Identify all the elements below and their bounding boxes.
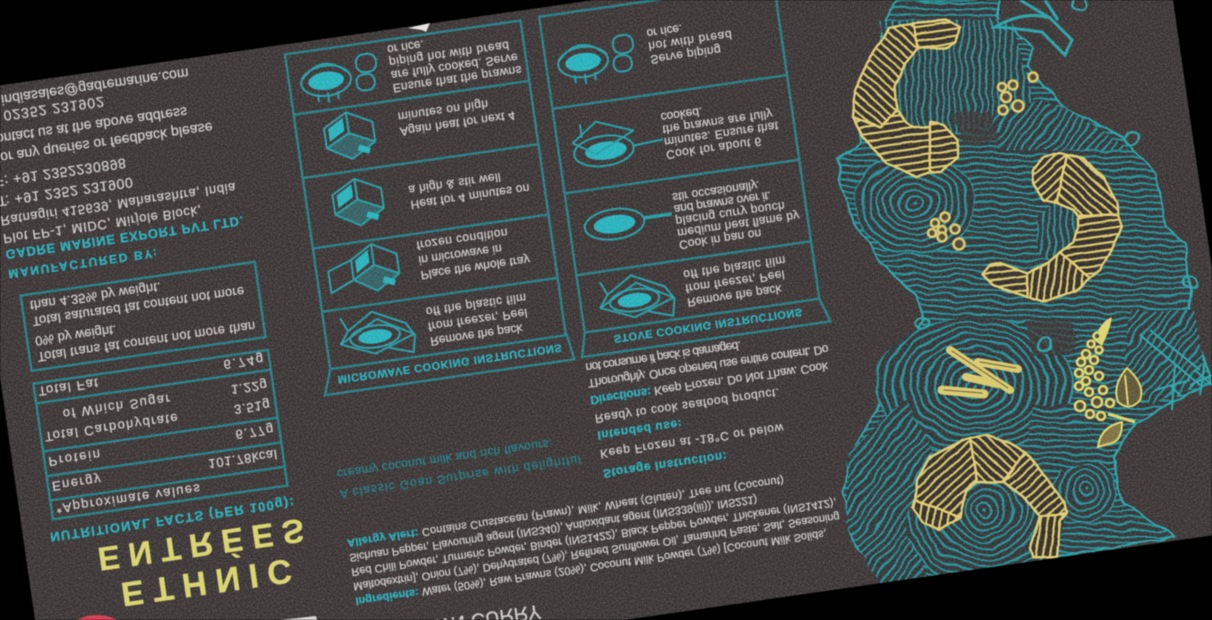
- step 2: Place the whole tray: [420, 253, 531, 282]
- step 4: Again heat for next 4: [399, 108, 516, 139]
- step 3: the prawns are fully: [662, 107, 773, 137]
- step 1: off the plastic film: [682, 253, 786, 282]
- step 1: [596, 253, 791, 326]
- panel: fat content note: Total saturated fat content not more: [31, 284, 245, 329]
- logo: white wedge: [280, 616, 317, 620]
- step 2: in microwave in: [418, 242, 503, 267]
- text block: manufacturer: Plot FP-1, MIDC, Mirjole Block,: [2, 203, 202, 246]
- banner: stove heading: [579, 298, 831, 357]
- panel: nutrition table: 101.78kcal: [208, 447, 278, 471]
- panel: fat content note: than 4.35% by weight.: [29, 280, 162, 313]
- step 3: cooked.: [660, 105, 703, 124]
- step 2: [325, 222, 531, 297]
- teal contour blob: [837, 0, 1212, 585]
- step 2: and prawns over it.: [673, 189, 772, 216]
- text block: manufacturer: T: +91 2352 231900: [0, 175, 134, 210]
- step 4: Serve piping: [649, 43, 722, 67]
- prawn: top left: [853, 20, 960, 177]
- step 3: Cook for about 6: [665, 134, 763, 162]
- prawn: bottom: [913, 435, 1067, 558]
- icon: teal star sprigs: [1140, 330, 1212, 410]
- panel: nutrition table: Energy: [51, 472, 102, 494]
- text block: storage, use and directions: Keep Frozen at -18°C or below: [599, 421, 785, 461]
- step 2: [581, 173, 802, 265]
- step 1: off the plastic film: [425, 291, 527, 319]
- logo: red arc: [77, 615, 117, 620]
- title: Ethnic Entrees: ENTRÉES: [95, 512, 307, 578]
- text block: manufacturer: [0, 61, 247, 281]
- icon: yellow spheres top: [998, 72, 1038, 114]
- step 1: [337, 290, 532, 362]
- dark gaps: [950, 20, 1075, 355]
- panel: fat content note: Total trans fat content not more than: [37, 319, 256, 365]
- text block: storage, use and directions: [585, 326, 843, 481]
- text block: ingredients and allergy: [346, 467, 842, 607]
- text block: manufacturer: MANUFACTURED BY:: [7, 246, 158, 281]
- text block: storage, use and directions: Intended use:: [597, 417, 683, 443]
- panel: nutrition table: 6.74g: [223, 352, 264, 372]
- panel: nutrition table: Total Carbohydrate: [44, 411, 179, 444]
- step 1: from freezer, Peel: [427, 306, 528, 334]
- text block: teal description: creamy coconut milk and rich flavours.: [336, 436, 553, 481]
- step 2: placing curry pouch: [675, 199, 786, 228]
- banner: microwave heading: MICROWAVE COOKING INSTRUCTIONS: [337, 341, 562, 385]
- step 5: piping hot with bread: [388, 38, 510, 70]
- panel: fat content note: [21, 262, 266, 371]
- text block: storage, use and directions: Ready to cook seafood product.: [594, 385, 780, 426]
- panel: nutrition table: Protein: [48, 447, 101, 469]
- icon: yellow sticks: [942, 350, 1018, 394]
- step 4: [555, 15, 736, 87]
- prawn: middle right: [983, 153, 1122, 302]
- icon: fish spur at top: [995, 0, 1072, 55]
- panel: microwave cooking instructions: [276, 20, 574, 395]
- text block: storage, use and directions: Thoroughly. Once opened use entire content. Do: [587, 342, 830, 391]
- step 4: hot with bread: [648, 28, 733, 53]
- panel: nutrition table: 1.22g: [230, 377, 268, 397]
- top white mark: [408, 23, 430, 32]
- banner: microwave heading: [321, 335, 574, 395]
- text block: storage, use and directions: Directions: Keep Frozen. Do Not Thaw. Cook: [589, 359, 830, 407]
- text block: ingredients and allergy: Red Chili Powder, Turmeric Powder, Binder (INS1422), Black Pepper Powder, Thickener (INS1412),: [351, 496, 837, 578]
- step 5: Ensure that the prawns: [392, 63, 523, 95]
- step 5: [297, 24, 523, 108]
- icon: pepper berry cluster with leaves: [1075, 317, 1141, 447]
- title: Ethnic Entrees: ETHNIC: [119, 551, 294, 613]
- heading: nutritional facts: NUTRITIONAL FACTS (PER 100g):: [49, 495, 295, 545]
- text block: storage, use and directions: not consume if pack is damaged.: [585, 338, 742, 375]
- panel: nutrition table: *Approximate values: [55, 481, 202, 517]
- step 2: stir occasionally.: [671, 178, 760, 205]
- text block: teal description: A classic Goan Surprise with delightful: [339, 452, 582, 501]
- banner: stove heading: STOVE COOKING INSTRUCTIONS: [613, 305, 803, 344]
- text block: ingredients and allergy: Ingredients: Water (50%), Raw Prawns (20%), Coconut Milk Powder (7%) [Coconut Milk Solids,: [355, 527, 828, 607]
- step 5: are fully cooked. Serve: [390, 50, 519, 82]
- step 4: or rice.: [646, 22, 683, 41]
- step 3: [570, 94, 782, 175]
- step 2: frozen condition: [416, 226, 509, 253]
- illustration: prawns on teal contour pattern: [837, 0, 1212, 585]
- text block: ingredients and allergy: Allergy Alert: Contains Crustacean (Prawn), Milk, Wheat (Gluten), Tree nut (Coconut): [346, 474, 785, 548]
- step 4: minutes on high: [397, 97, 489, 124]
- step 3: Heat for 4 minutes on: [410, 181, 530, 212]
- flipped rotated packaging layout: [0, 0, 867, 620]
- step 5: or rice.: [386, 38, 425, 57]
- panel: nutrition table: Total Fat: [37, 375, 99, 399]
- icon: yellow spheres middle: [928, 212, 964, 250]
- panel: nutrition table: [33, 350, 287, 519]
- text block: manufacturer: GADRE MARINE EXPORT PVT LTD.: [5, 213, 244, 262]
- step 1: Remove the pack: [429, 321, 524, 349]
- panel: stove cooking instructions: [533, 0, 831, 357]
- step 4: [322, 88, 518, 162]
- panel: nutrition table: 3.51g: [233, 397, 271, 417]
- step 1: from freezer, Peel: [684, 268, 785, 296]
- step 2: Cook in pan on: [678, 226, 762, 252]
- panel: nutrition table: of Which Sugar: [62, 391, 172, 422]
- panel: nutrition table: 6.77g: [235, 422, 274, 442]
- step 1: Remove the pack: [686, 282, 783, 310]
- text block: ingredients and allergy: Maltodextrin], Onion (7%), Dehydrated (7%), Refined Sunflower Oil, Tamarind Paste, Salt, Seasoning: [353, 510, 840, 592]
- text block: storage, use and directions: Storage Instruction:: [602, 449, 728, 481]
- panel: fat content note: 0% by weight.: [34, 322, 118, 349]
- text block: manufacturer: Ratnagiri 415639, Maharashtra, India: [0, 180, 237, 229]
- text block: ingredients and allergy: Sichuan Pepper, Flavouring agent (INS340), Antioxidant agent (INS339(iii)), INS221): [348, 493, 758, 563]
- step 2: medium heat flame by: [676, 209, 800, 240]
- step 3: a high & stir well: [408, 170, 502, 197]
- title: Ethnic Entrees: [95, 512, 312, 616]
- step 3: [331, 154, 531, 229]
- step 3: minutes. Ensure that: [663, 119, 780, 149]
